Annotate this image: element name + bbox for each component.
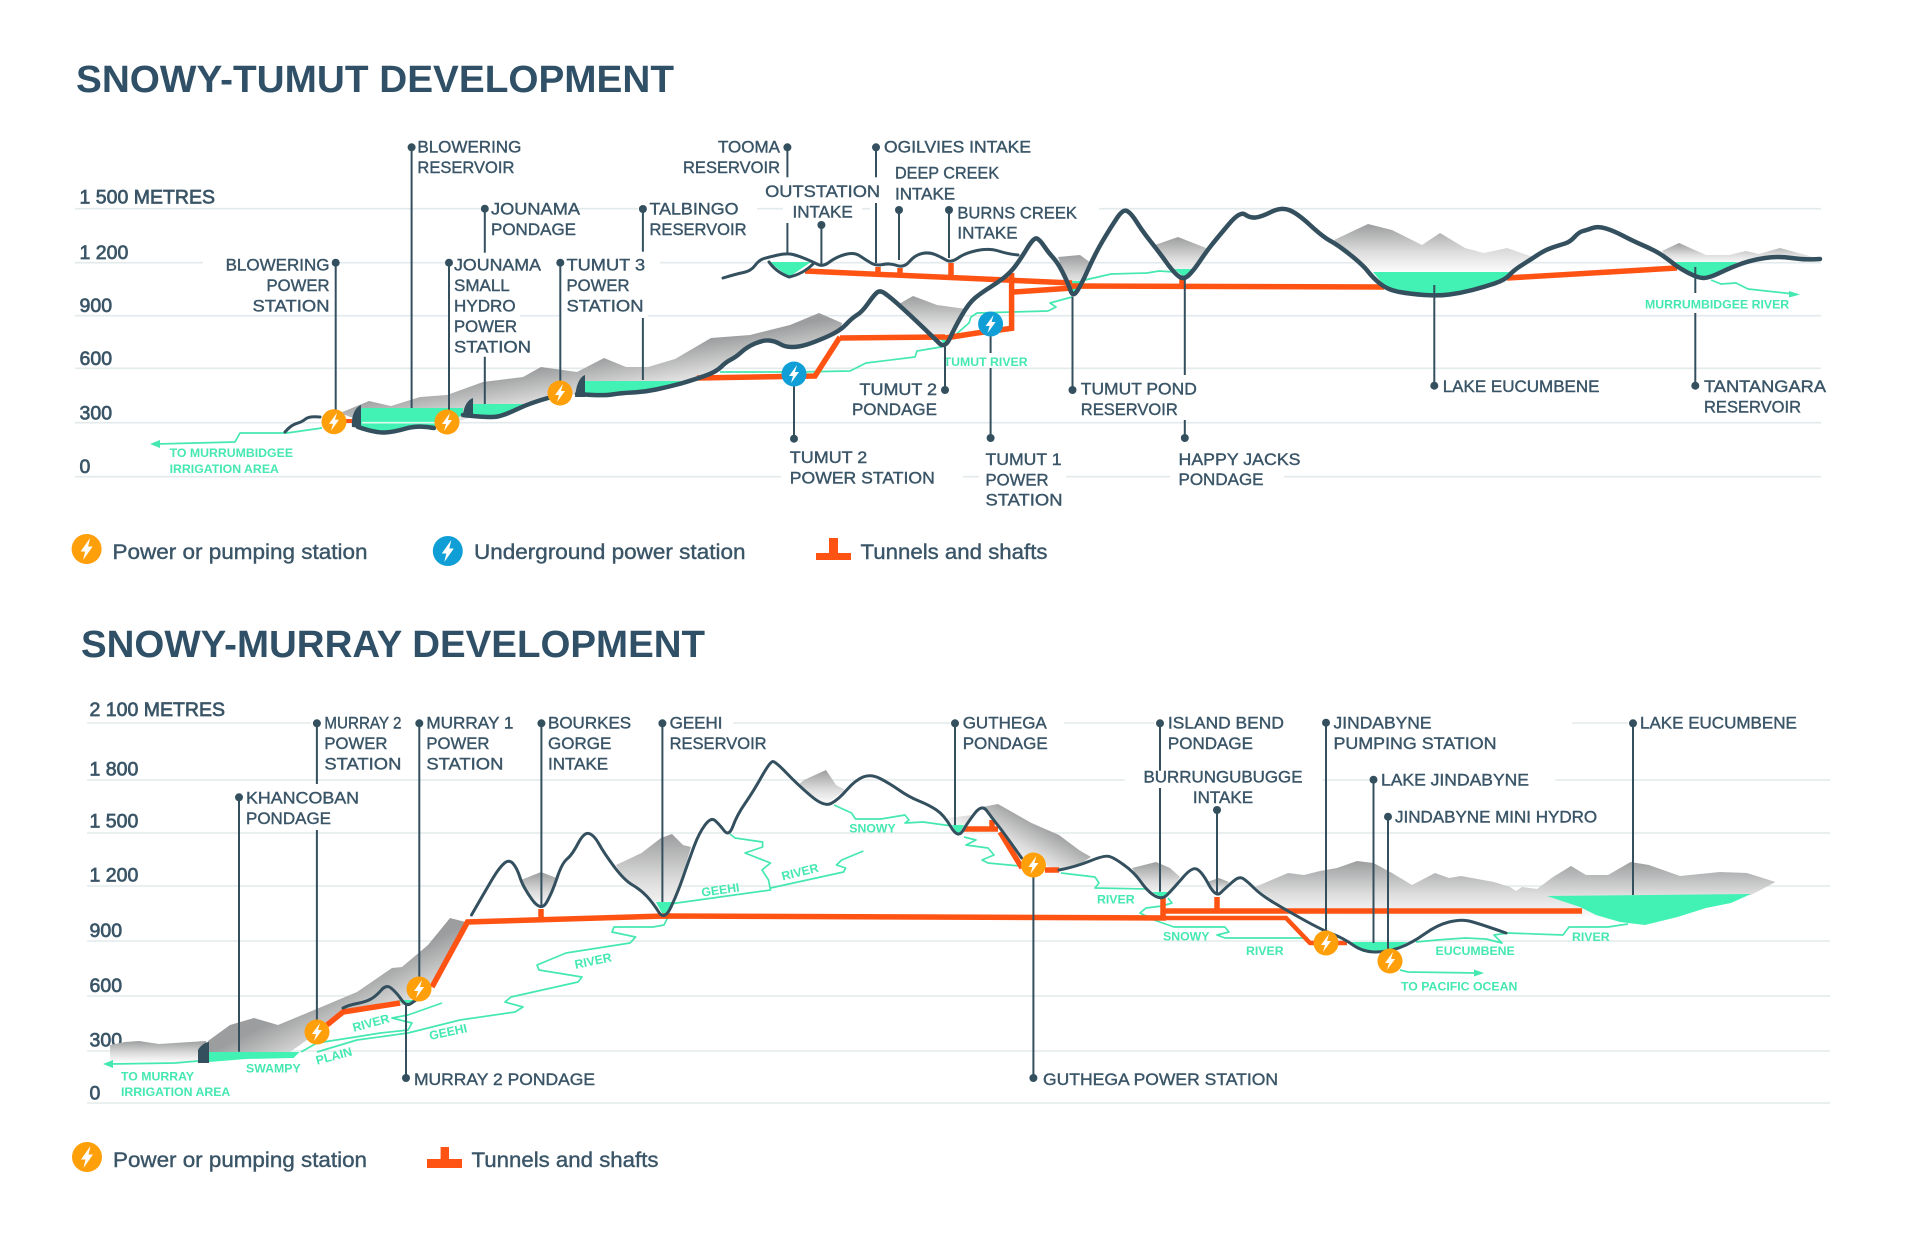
heading: Snowy-Murray: SNOWY-MURRAY DEVELOPMENT — [81, 624, 705, 666]
legend: Tumut — [72, 534, 1048, 566]
elevation axis labels: 300 — [80, 402, 112, 424]
panel: Snowy-Murray development — [72, 624, 1830, 1172]
elevation axis labels: 900 — [80, 295, 112, 317]
elevation axis labels: 1 200 — [90, 864, 138, 886]
dam: Khancoban — [198, 1042, 209, 1063]
river labels: RIVER — [1572, 930, 1610, 944]
callout: Deep Creek Intake: DEEP CREEK — [895, 164, 1000, 183]
heading: Snowy-Tumut: SNOWY-TUMUT DEVELOPMENT — [76, 59, 674, 101]
callout: Jindabyne Pumping Station: PUMPING STATION — [1334, 734, 1496, 753]
callout: Tumut 3 Power Station: STATION — [566, 296, 644, 315]
callout: Tumut 2 Pondage — [852, 347, 949, 419]
callout: Tooma Reservoir: TOOMA — [718, 138, 781, 157]
callout: Jindabyne Mini Hydro: JINDABYNE MINI HYDRO — [1395, 808, 1597, 827]
elevation axis labels: 1 500 METRES — [80, 186, 215, 208]
callout: Guthega Pondage: GUTHEGA — [963, 713, 1047, 732]
callout: Lake Jindabyne: LAKE JINDABYNE — [1381, 771, 1529, 790]
rivers — [150, 271, 1800, 448]
river labels: RIVER — [1246, 944, 1284, 958]
dams — [352, 375, 585, 428]
callout: Blowering Power Station: POWER — [266, 276, 330, 295]
callout: Talbingo Reservoir — [639, 200, 746, 252]
callout: Bourkes Gorge Intake: BOURKES — [548, 713, 631, 732]
callout: Khancoban Pondage — [235, 788, 359, 1052]
rivers — [103, 805, 1628, 1068]
callout: Tumut 3 Power Station — [556, 255, 645, 384]
callout: Outstation Intake: INTAKE — [793, 203, 853, 222]
terrain profile — [343, 761, 1506, 1008]
callout: Murray 2 Pondage — [402, 1005, 595, 1089]
callout: Tooma Reservoir — [683, 138, 791, 253]
callout: Blowering Reservoir — [408, 138, 521, 408]
callout: Burrungubugge Intake: INTAKE — [1193, 788, 1253, 807]
callout: Khancoban Pondage: PONDAGE — [246, 809, 331, 828]
callout: Island Bend Pondage: PONDAGE — [1168, 734, 1253, 753]
legend: Murray: Power or pumping station — [113, 1148, 367, 1172]
callout: Burrungubugge Intake — [1144, 767, 1302, 895]
river labels — [170, 298, 1789, 476]
elevation axis labels: 600 — [80, 348, 112, 370]
callout: Blowering Power Station: BLOWERING — [226, 255, 330, 274]
callout: Tumut 1 Power Station: TUMUT 1 — [986, 450, 1062, 469]
callout: Tumut 2 Pondage: PONDAGE — [852, 400, 937, 419]
callout: Tantangara Reservoir: TANTANGARA — [1704, 377, 1827, 396]
legend: Murray — [72, 1142, 658, 1172]
legend: Tumut: Tunnels and shafts — [860, 540, 1048, 564]
callout: Jounama Pondage: PONDAGE — [491, 220, 576, 239]
river labels: TO MURRUMBIDGEE — [170, 446, 293, 460]
callout: Tumut Pond Reservoir: RESERVOIR — [1081, 400, 1178, 419]
callout: Happy Jacks Pondage: PONDAGE — [1178, 470, 1264, 489]
callout: Jounama Small Hydro Power Station: HYDRO — [454, 296, 516, 315]
callout: Burns Creek Intake — [945, 203, 1078, 258]
callout: Jounama Small Hydro Power Station: JOUNAMA — [454, 255, 542, 274]
grey mountain backdrop — [340, 224, 1817, 428]
callout: Tumut 2 Power Station: POWER STATION — [790, 469, 935, 488]
elevation axis labels — [90, 699, 225, 1104]
terrain profile — [285, 209, 1820, 433]
callout: Murray 1 Power Station — [415, 713, 513, 978]
callout: Happy Jacks Pondage — [1178, 277, 1300, 489]
river labels: SNOWY — [1163, 930, 1209, 944]
callout: Blowering Power Station: STATION — [252, 296, 330, 315]
callout: Murray 2 Power Station: MURRAY 2 — [324, 713, 401, 732]
legend: Tumut: Power or pumping station — [112, 540, 368, 564]
elevation axis labels — [80, 186, 215, 478]
callout: Talbingo Reservoir: RESERVOIR — [650, 220, 746, 239]
callout: Tantangara Reservoir: RESERVOIR — [1704, 398, 1801, 417]
river labels: GEEHI — [428, 1021, 468, 1043]
reservoirs and pondages — [358, 262, 1738, 433]
elevation axis labels: 1 200 — [80, 242, 128, 264]
callout: Jindabyne Pumping Station: JINDABYNE — [1334, 713, 1432, 732]
callout: Bourkes Gorge Intake: GORGE — [548, 734, 611, 753]
callout: Jounama Pondage — [481, 200, 581, 253]
callout: Blowering Power Station — [226, 255, 340, 412]
callout: Jounama Small Hydro Power Station: POWER — [454, 317, 517, 336]
callout: Murray 2 Power Station: STATION — [324, 754, 401, 773]
tunnels and shafts — [346, 263, 1677, 421]
callout: Murray 1 Power Station: STATION — [426, 754, 503, 773]
callout: Tumut 3 Power Station: POWER — [566, 276, 630, 295]
callout: Burns Creek Intake: INTAKE — [957, 224, 1018, 243]
legend: Murray: Tunnels and shafts — [472, 1148, 658, 1172]
callout: Blowering Reservoir: RESERVOIR — [417, 158, 514, 177]
callout: Jindabyne Mini Hydro — [1384, 808, 1597, 950]
panel: Snowy-Tumut development — [72, 59, 1827, 566]
elevation axis labels: 2 100 METRES — [90, 699, 225, 721]
callout: Bourkes Gorge Intake: INTAKE — [548, 754, 608, 773]
river labels: SWAMPY — [246, 1062, 301, 1076]
callout: Guthega Power Station — [1029, 877, 1278, 1089]
callout: Tumut 1 Power Station — [986, 336, 1062, 510]
callout: Guthega Pondage: PONDAGE — [963, 734, 1048, 753]
elevation axis labels: 1 500 — [90, 810, 138, 832]
callout: Blowering Reservoir: BLOWERING — [417, 138, 521, 157]
callout: Outstation Intake — [765, 182, 880, 266]
callout: Jounama Small Hydro Power Station: SMALL — [454, 276, 510, 295]
river labels: PLAIN — [314, 1045, 354, 1068]
river labels — [121, 822, 1610, 1099]
callout: Tantangara Reservoir — [1691, 267, 1827, 417]
callout: Happy Jacks Pondage: HAPPY JACKS — [1178, 450, 1300, 469]
callout: Tumut 1 Power Station: POWER — [986, 470, 1048, 489]
river labels: EUCUMBENE — [1436, 944, 1515, 958]
callout: Tumut 3 Power Station: TUMUT 3 — [566, 255, 645, 274]
callout: Tumut 2 Pondage: TUMUT 2 — [860, 380, 937, 399]
callout: Lake Eucumbene: LAKE EUCUMBENE — [1443, 377, 1600, 396]
callout: Murray 1 Power Station: MURRAY 1 — [426, 713, 513, 732]
callout: Ogilvies Intake: OGILVIES INTAKE — [884, 138, 1031, 157]
callout: Murray 1 Power Station: POWER — [426, 734, 489, 753]
callout: Island Bend Pondage — [1156, 713, 1284, 892]
elevation axis labels: 300 — [90, 1030, 122, 1052]
callout: Geehi Reservoir: RESERVOIR — [670, 734, 767, 753]
callout: Geehi Reservoir: GEEHI — [670, 713, 723, 732]
reservoirs and pondages — [209, 825, 1751, 1062]
callout: Bourkes Gorge Intake — [537, 713, 631, 908]
grey mountain backdrop — [110, 770, 1776, 1063]
callout: Deep Creek Intake: INTAKE — [895, 184, 955, 203]
callout: Outstation Intake: OUTSTATION — [765, 182, 880, 201]
legend: Tumut: Underground power station — [474, 540, 746, 564]
callout: Guthega Pondage — [951, 713, 1048, 825]
callout: Tumut 1 Power Station: STATION — [986, 491, 1062, 510]
callout: Tooma Reservoir: RESERVOIR — [683, 158, 780, 177]
callout: Lake Eucumbene: LAKE EUCUMBENE — [1640, 713, 1797, 732]
tunnels and shafts — [327, 820, 1582, 1025]
station icons — [322, 312, 1003, 434]
river labels: RIVER — [780, 861, 820, 883]
callout: Burns Creek Intake: BURNS CREEK — [957, 203, 1078, 222]
river labels: SNOWY — [849, 822, 896, 836]
callout: Lake Jindabyne — [1370, 771, 1529, 943]
river labels: GEEHI — [701, 880, 740, 900]
callout: Island Bend Pondage: ISLAND BEND — [1168, 713, 1284, 732]
callout: Lake Eucumbene — [1430, 285, 1600, 396]
callout: Jounama Small Hydro Power Station — [445, 255, 542, 412]
river labels: TO PACIFIC OCEAN — [1401, 980, 1517, 994]
elevation axis labels: 600 — [90, 975, 122, 997]
elevation axis labels: 0 — [80, 456, 90, 478]
station icons — [304, 852, 1402, 1044]
callout: Tumut 2 Power Station — [790, 383, 935, 488]
river labels: TUMUT RIVER — [944, 355, 1028, 369]
river labels: RIVER — [351, 1011, 391, 1035]
callout: Jindabyne Pumping Station — [1322, 713, 1496, 932]
callout: Murray 2 Power Station — [313, 713, 401, 1020]
elevation axis labels: 1 800 — [90, 758, 138, 780]
elevation axis labels: 900 — [90, 920, 122, 942]
callout: Jounama Pondage: JOUNAMA — [491, 200, 581, 219]
elevation axis labels: 0 — [90, 1082, 100, 1104]
callout: Geehi Reservoir — [658, 713, 767, 902]
callout: Jounama Small Hydro Power Station: STATION — [454, 338, 531, 357]
callout: Tumut Pond Reservoir — [1068, 297, 1197, 419]
callout: Tumut Pond Reservoir: TUMUT POND — [1081, 380, 1197, 399]
callout: Talbingo Reservoir: TALBINGO — [650, 200, 738, 219]
callout: Deep Creek Intake — [895, 164, 1000, 260]
callout: Burrungubugge Intake: BURRUNGUBUGGE — [1144, 767, 1302, 786]
river labels: RIVER — [573, 950, 613, 972]
callout: Tumut 2 Power Station: TUMUT 2 — [790, 448, 867, 467]
river labels: IRRIGATION AREA — [170, 462, 279, 476]
callout: Khancoban Pondage: KHANCOBAN — [246, 788, 359, 807]
callout: Lake Eucumbene — [1629, 713, 1797, 895]
callout: Murray 2 Power Station: POWER — [324, 734, 387, 753]
river labels: MURRUMBIDGEE RIVER — [1645, 298, 1789, 312]
river labels: IRRIGATION AREA — [121, 1085, 230, 1099]
callout: Murray 2 Pondage: MURRAY 2 PONDAGE — [414, 1070, 595, 1089]
river labels: TO MURRAY — [121, 1070, 194, 1084]
callout: Ogilvies Intake — [872, 138, 1031, 263]
callout: Guthega Power Station: GUTHEGA POWER STATION — [1043, 1070, 1278, 1089]
river labels: RIVER — [1097, 892, 1135, 906]
